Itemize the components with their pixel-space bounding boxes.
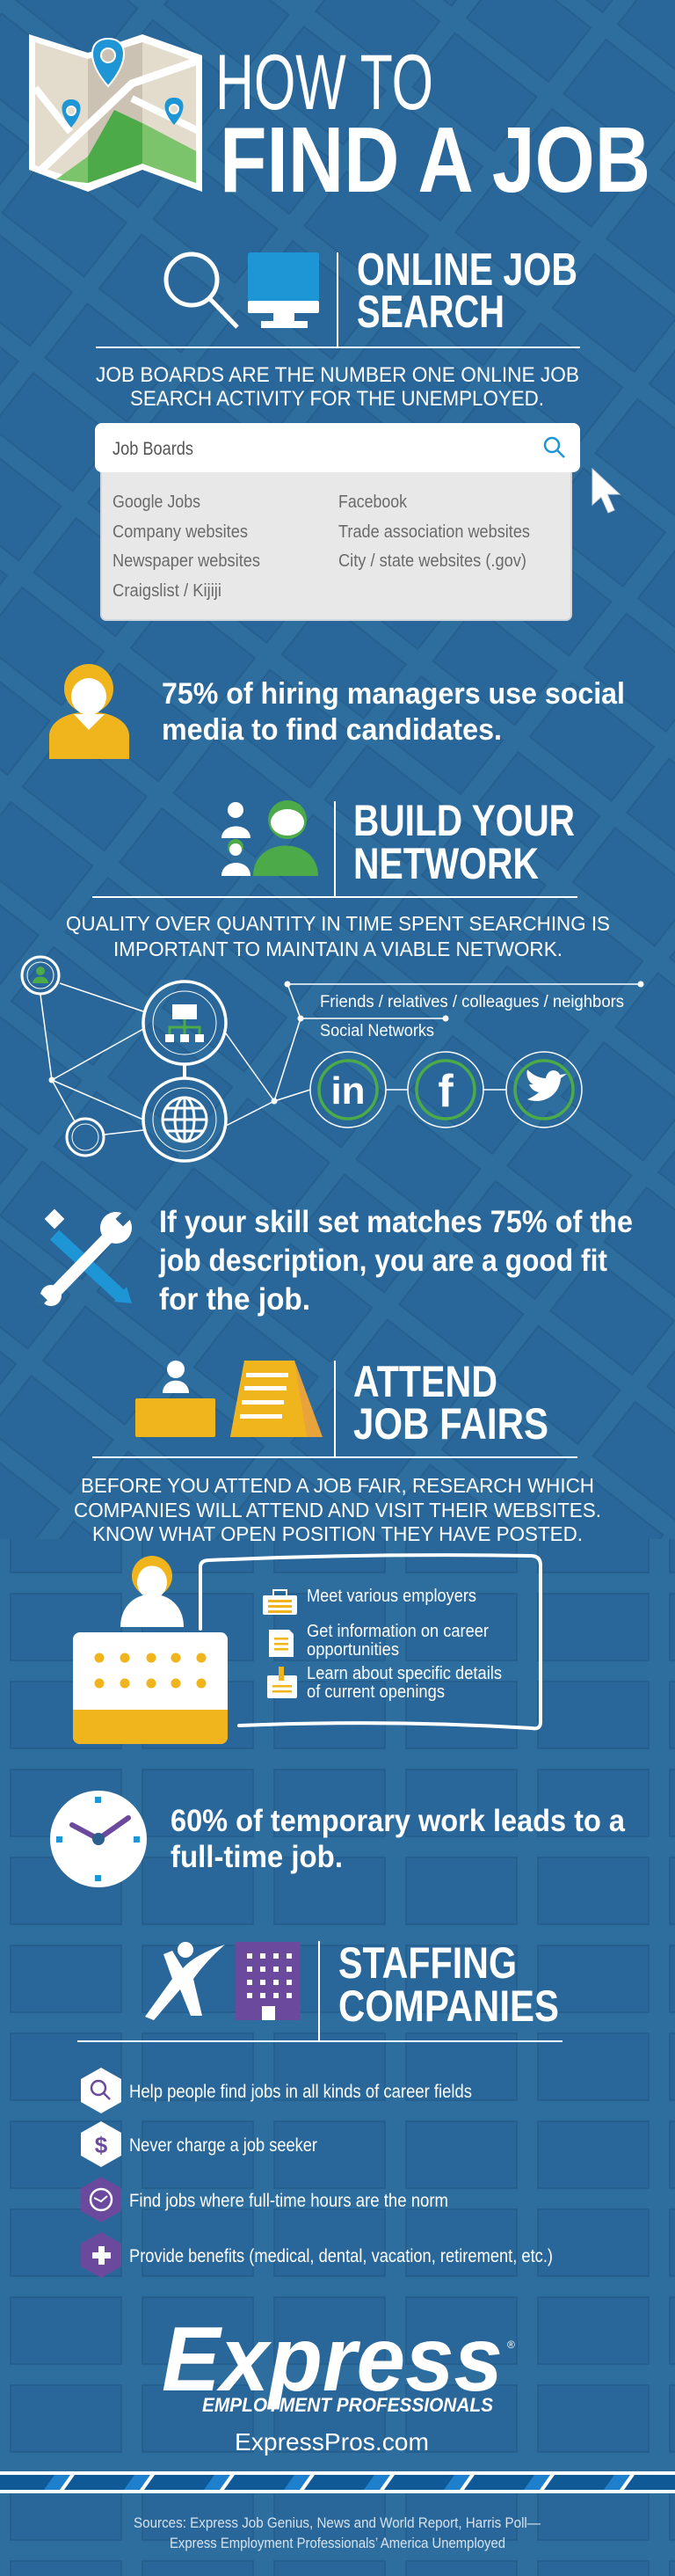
item: never charge [81, 2121, 317, 2167]
stat: social media: media to find candidates. [162, 713, 502, 747]
list: staffing company benefits [81, 2068, 553, 2278]
network diagram [22, 957, 643, 1161]
text: job fair advice [74, 1474, 601, 1545]
item: full-time hours [81, 2177, 448, 2222]
text: network statement [66, 912, 610, 960]
search box with dropdown: Company websites [112, 522, 248, 542]
logo: Express Employment Professionals: Express [162, 2309, 503, 2411]
icon: clock [50, 1791, 147, 1887]
callout: job fair benefits: Get information on career [307, 1622, 489, 1641]
search box with dropdown: Newspaper websites [112, 551, 260, 571]
search box with dropdown: Craigslist / Kijiji [112, 581, 221, 601]
node: person [22, 957, 59, 994]
illustration: recruiter at booth [73, 1556, 228, 1744]
section heading: build your network [92, 796, 577, 897]
section heading: attend job fairs: ATTEND [353, 1357, 497, 1406]
logo: Express Employment Professionals: EMPLOYMENT PROFESSIONALS [202, 2394, 493, 2416]
callout: job fair benefits: Learn about specific details [307, 1664, 502, 1683]
item: career fields [81, 2068, 472, 2113]
icon: hiring manager woman [49, 664, 129, 759]
search box with dropdown: Facebook [338, 493, 408, 512]
callout: job fair benefits [200, 1555, 541, 1728]
icon: wrench and pencil [33, 1209, 132, 1308]
text: website: ExpressPros.com [235, 2428, 429, 2456]
callout: job fair benefits: of current openings [307, 1682, 445, 1702]
icon: mouse cursor [592, 469, 620, 513]
icon: express figure [145, 1942, 225, 2020]
node: globe [143, 1078, 226, 1161]
text: job boards statement [96, 363, 579, 411]
text: network statement: QUALITY OVER QUANTITY IN TIME SPENT SEARCHING IS [66, 912, 610, 935]
icon: sign [230, 1361, 323, 1437]
icon: linkedin: in [330, 1069, 366, 1113]
section heading: build your network: NETWORK [353, 839, 539, 888]
stat: skill set [158, 1205, 633, 1317]
callout: job fair benefits: Meet various employers [307, 1587, 476, 1606]
text: sources [134, 2514, 541, 2551]
section heading: staffing companies: COMPANIES [338, 1981, 559, 2031]
section heading: online job search: SEARCH [357, 287, 504, 338]
stat: skill set: job description, you are a good fit [158, 1244, 607, 1278]
section heading: staffing companies: STAFFING [338, 1938, 517, 1988]
icon: booth [135, 1361, 215, 1437]
stat: social media: 75% of hiring managers use social [162, 677, 625, 711]
text: sources: Sources: Express Job Genius, News and World Report, Harris Poll— [134, 2514, 541, 2531]
node: empty [67, 1119, 104, 1156]
section heading: build your network: BUILD YOUR [353, 796, 575, 845]
label: social networks: Social Networks [320, 1022, 434, 1040]
icon: briefcase [263, 1590, 297, 1615]
item: benefits [81, 2232, 553, 2278]
stat: skill set: for the job. [159, 1282, 310, 1317]
section heading: attend job fairs: JOB FAIRS [353, 1399, 548, 1449]
callout: job fair benefits: opportunities [307, 1640, 399, 1660]
icon: facebook [408, 1052, 483, 1127]
icon: document [269, 1630, 294, 1657]
section heading: staffing companies [77, 1938, 562, 2041]
section heading: online job search [96, 244, 580, 347]
stat: temporary work [171, 1804, 625, 1874]
icon: monitor [248, 252, 319, 328]
search box with dropdown: Google Jobs [112, 493, 200, 512]
item: benefits: Provide benefits (medical, dental, vacation, retirement, etc.) [129, 2246, 553, 2266]
icon: badge [267, 1667, 297, 1698]
search box with dropdown: City / state websites (.gov) [338, 551, 526, 571]
text: job fair advice: BEFORE YOU ATTEND A JOB FAIR, RESEARCH WHICH [81, 1474, 594, 1497]
text: job fair advice: KNOW WHAT OPEN POSITION THEY HAVE POSTED. [92, 1522, 583, 1545]
item: never charge: Never charge a job seeker [129, 2135, 317, 2156]
decorative stripe band [0, 2471, 675, 2493]
item: never charge: $ [95, 2132, 108, 2158]
text: job boards statement: JOB BOARDS ARE THE NUMBER ONE ONLINE JOB [96, 363, 579, 387]
section heading: online job search: ONLINE JOB [357, 244, 577, 296]
stat: social media [162, 677, 625, 747]
icon: building [236, 1942, 301, 2020]
icon: facebook: f [438, 1066, 454, 1117]
title: HOW TO [215, 38, 433, 126]
icon: people group [221, 800, 318, 876]
stat: skill set: If your skill set matches 75% of the [159, 1205, 633, 1239]
search box with dropdown [95, 423, 580, 620]
section heading: attend job fairs [92, 1357, 577, 1457]
text: job boards statement: SEARCH ACTIVITY FOR THE UNEMPLOYED. [130, 387, 544, 411]
item: full-time hours: Find jobs where full-time hours are the norm [129, 2191, 448, 2211]
icon: magnifier [166, 254, 237, 327]
title [215, 38, 650, 212]
logo: Express Employment Professionals: ® [507, 2339, 515, 2351]
stat: temporary work: full-time job. [171, 1840, 343, 1874]
icon: linkedin [310, 1052, 386, 1127]
search box with dropdown: Job Boards [112, 439, 193, 459]
node: org chart [143, 982, 226, 1064]
text: job fair advice: COMPANIES WILL ATTEND AND VISIT THEIR WEBSITES. [74, 1499, 601, 1522]
label: friends: Friends / relatives / colleagues / neighbors [320, 993, 624, 1011]
icon: twitter [506, 1052, 582, 1127]
item: career fields: Help people find jobs in all kinds of career fields [129, 2082, 472, 2102]
icon: folded map [29, 34, 202, 192]
search box with dropdown: Trade association websites [338, 522, 530, 542]
text: network statement: IMPORTANT TO MAINTAIN A VIABLE NETWORK. [113, 938, 562, 960]
text: sources: Express Employment Professionals’ America Unemployed [170, 2535, 505, 2551]
stat: temporary work: 60% of temporary work leads to a [171, 1804, 625, 1838]
